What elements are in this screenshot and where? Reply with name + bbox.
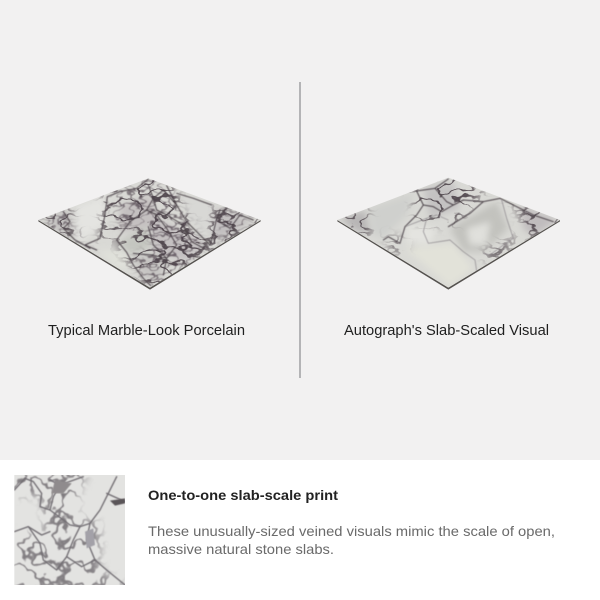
left marble slab: typical porcelain — [38, 178, 261, 290]
label: autograph's slab-scaled visual: Autograph's Slab-Scaled Visual — [344, 323, 549, 339]
right marble slab: slab-scaled visual — [337, 178, 560, 290]
dense vein texture — [344, 180, 558, 265]
label: typical marble-look porcelain: Typical Marble-Look Porcelain — [48, 323, 245, 339]
vein texture — [14, 475, 125, 585]
caption heading: One-to-one slab-scale print — [148, 487, 338, 503]
caption body text: massive natural stone slabs. — [148, 541, 334, 557]
center divider line — [300, 82, 301, 378]
marble swatch thumbnail — [14, 475, 125, 585]
top comparison background — [0, 0, 600, 460]
fine vein texture — [39, 180, 256, 286]
caption body text: These unusually-sized veined visuals mimic the scale of open, — [148, 523, 555, 539]
bottom caption background — [0, 460, 600, 600]
caption body text — [148, 523, 555, 557]
dense vein texture — [45, 180, 258, 284]
